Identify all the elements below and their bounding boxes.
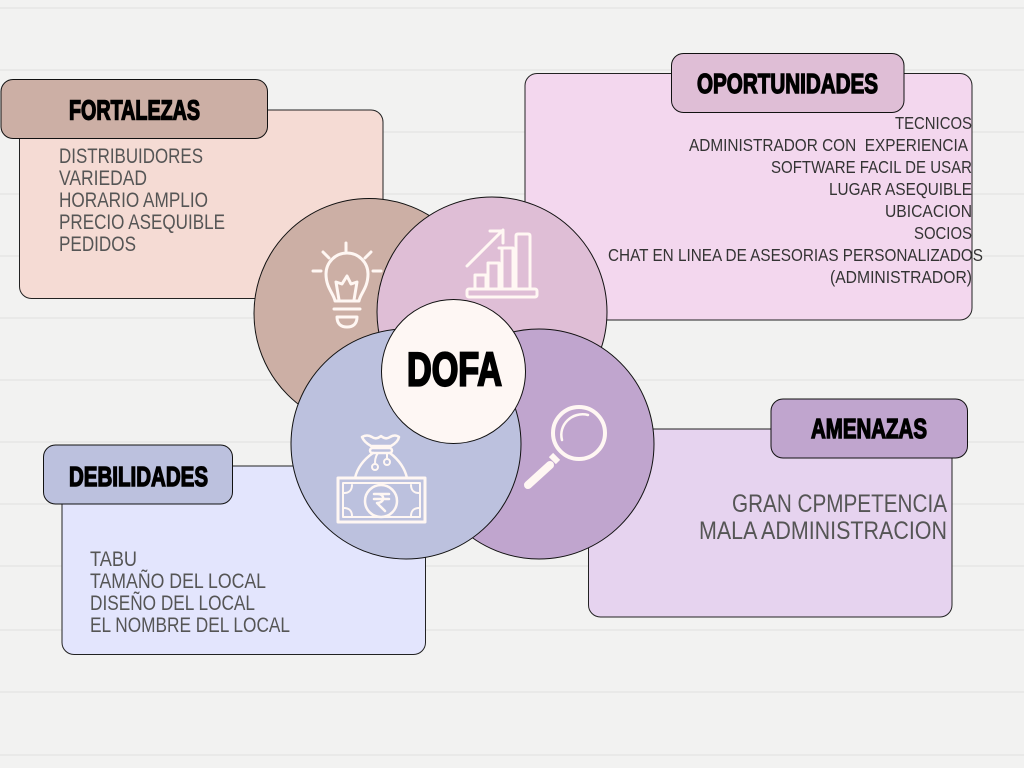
circle: fortalezas (254, 198, 484, 428)
circle: oportunidades (377, 197, 607, 427)
heading: fortalezas: FORTALEZAS (69, 94, 200, 126)
heading: amenazas: AMENAZAS (811, 413, 927, 444)
fortalezas list: DISTRIBUIDORES (59, 144, 203, 168)
debilidades list: TABU (90, 547, 137, 571)
fortalezas list: PEDIDOS (59, 232, 136, 256)
icon: money bag with banknote (338, 436, 425, 522)
debilidades list: TAMAÑO DEL LOCAL (90, 568, 266, 593)
fortalezas list: PRECIO ASEQUIBLE (59, 210, 225, 234)
circle: debilidades (291, 329, 521, 559)
oportunidades list: (ADMINISTRADOR) (830, 267, 972, 287)
icon: magnifying glass (528, 407, 605, 485)
heading: oportunidades: OPORTUNIDADES (697, 68, 878, 99)
oportunidades list: SOCIOS (914, 223, 972, 243)
heading: debilidades: DEBILIDADES (69, 461, 208, 492)
heading: oportunidades (672, 54, 904, 112)
amenazas list (699, 490, 947, 545)
debilidades list: DISEÑO DEL LOCAL (90, 590, 255, 615)
oportunidades list: ADMINISTRADOR CON EXPERIENCIA (689, 135, 968, 155)
heading: fortalezas (1, 80, 268, 138)
amenazas list: MALA ADMINISTRACION (699, 517, 947, 545)
debilidades list (90, 547, 290, 637)
fortalezas list: VARIEDAD (59, 166, 147, 190)
panel: debilidades (62, 466, 426, 654)
oportunidades list (608, 113, 983, 287)
icon: light bulb (313, 243, 381, 327)
fortalezas list (59, 144, 225, 256)
panel: oportunidades (525, 74, 983, 320)
heading: amenazas (771, 399, 968, 458)
panel: fortalezas (20, 110, 383, 298)
icon: growth chart (467, 230, 537, 297)
oportunidades list: SOFTWARE FACIL DE USAR (771, 157, 972, 177)
oportunidades list: LUGAR ASEQUIBLE (829, 179, 972, 199)
panel: amenazas (588, 429, 952, 617)
circle: amenazas (424, 329, 654, 559)
heading: debilidades (44, 445, 232, 504)
debilidades list: EL NOMBRE DEL LOCAL (90, 613, 290, 637)
fortalezas list: HORARIO AMPLIO (59, 188, 208, 212)
oportunidades list: UBICACION (885, 201, 972, 221)
oportunidades list: TECNICOS (895, 113, 972, 133)
amenazas list: GRAN CPMPETENCIA (732, 490, 947, 518)
center circle: DOFA (382, 300, 526, 444)
center circle: DOFA: DOFA (407, 342, 502, 396)
